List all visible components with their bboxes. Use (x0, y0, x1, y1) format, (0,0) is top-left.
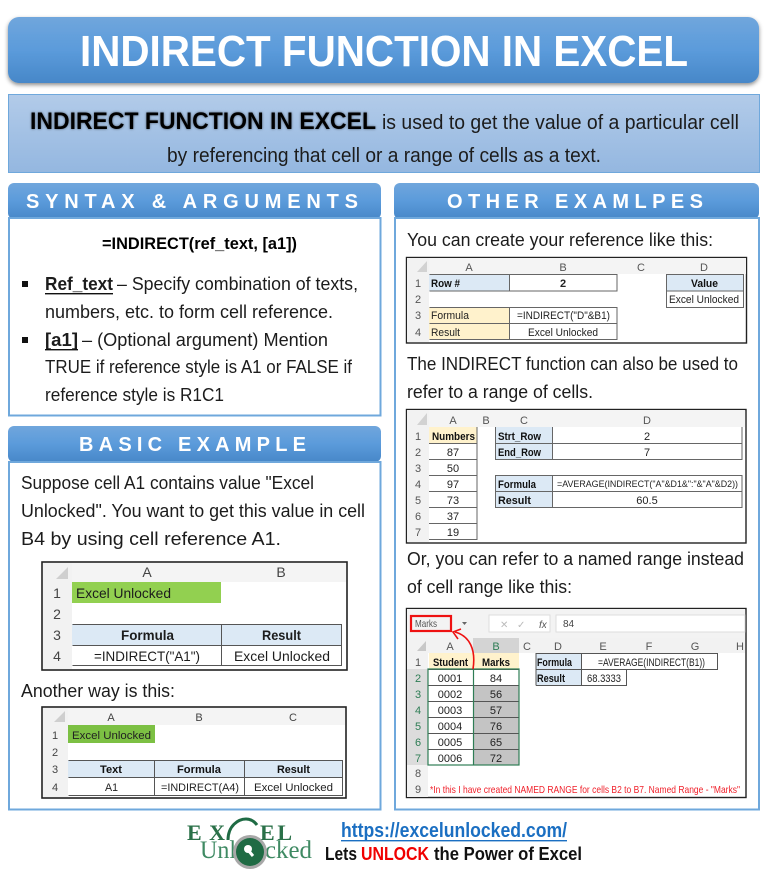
title banner (8, 17, 759, 83)
spreadsheet: named range: 5 (415, 721, 421, 733)
spreadsheet: concatenated reference: D (700, 262, 708, 274)
spreadsheet: average of range: 50 (447, 463, 459, 475)
bullet: ref_text: – Specify combination of texts, (117, 274, 358, 294)
icon: name box highlight (411, 616, 451, 631)
spreadsheet: named range: 76 (490, 721, 502, 733)
spreadsheet: concatenated reference: B (559, 262, 567, 274)
spreadsheet: average of range: Strt_Row (498, 431, 541, 443)
spreadsheet: concatenated reference: A (465, 262, 473, 274)
spreadsheet: concatenated reference: Result (431, 327, 460, 339)
spreadsheet: named range: 1 (415, 657, 421, 669)
spreadsheet: average of range: =AVERAGE(INDIRECT("A"&D1&":"&"A"&D2)) (557, 479, 738, 490)
spreadsheet: concatenated reference: 4 (415, 327, 421, 339)
spreadsheet: named range: 3 (415, 689, 421, 701)
example description: Unlocked". You want to get this value in cell (21, 501, 365, 521)
spreadsheet: named range: 8 (415, 768, 421, 780)
spreadsheet: named range: Formula (537, 657, 573, 669)
spreadsheet: named range: Student (433, 657, 468, 669)
spreadsheet: named range: 7 (415, 753, 421, 765)
spreadsheet: named range (406, 608, 746, 798)
spreadsheet: cell reference: B (195, 712, 203, 724)
spreadsheet: average of range: 5 (415, 495, 421, 507)
text: create your reference: You can create your reference like this: (407, 230, 713, 250)
spreadsheet: concatenated reference: 3 (415, 310, 421, 322)
bullet: ref_text: Ref_text (45, 274, 113, 294)
footer website link: https://excelunlocked.com/ (341, 820, 567, 842)
spreadsheet: cell reference (42, 707, 346, 798)
spreadsheet: direct reference: Result (262, 627, 301, 643)
spreadsheet: named range: fx (539, 620, 548, 631)
spreadsheet: named range: 0003 (438, 705, 462, 717)
spreadsheet: named range: A (446, 641, 454, 653)
spreadsheet: cell reference: 2 (52, 747, 58, 759)
heading: syntax and arguments (8, 183, 381, 219)
text: named range: of cell range like this: (407, 577, 572, 597)
spreadsheet: average of range: A (449, 415, 457, 427)
spreadsheet: concatenated reference: C (637, 262, 645, 274)
spreadsheet: average of range: D (643, 415, 651, 427)
spreadsheet: cell reference: Result (277, 764, 310, 776)
intro description panel: INDIRECT FUNCTION IN EXCEL (30, 108, 376, 135)
panel: other examples (394, 183, 759, 810)
footer tagline: UNLOCK (361, 844, 429, 864)
spreadsheet: direct reference (42, 562, 347, 670)
heading: other examples: OTHER EXAMLPES (447, 191, 703, 213)
spreadsheet: named range: Result (537, 673, 565, 685)
spreadsheet: concatenated reference: 1 (415, 278, 421, 290)
spreadsheet: named range: 0006 (438, 753, 462, 765)
spreadsheet: named range: 0001 (438, 673, 462, 685)
panel: syntax and arguments (8, 183, 381, 416)
spreadsheet: named range: C (523, 641, 531, 653)
bullet: ref_text: numbers, etc. to form cell reference. (45, 302, 333, 322)
spreadsheet: named range: 2 (415, 673, 421, 685)
text: range of cells (407, 354, 738, 402)
spreadsheet: named range: 0005 (438, 737, 462, 749)
spreadsheet: concatenated reference: Value (691, 278, 718, 290)
text: named range (407, 549, 744, 597)
spreadsheet: average of range: Result (498, 495, 531, 507)
text: range of cells: The INDIRECT function can also be used to (407, 354, 738, 374)
spreadsheet: average of range: 73 (447, 495, 459, 507)
spreadsheet: named range: 68.3333 (587, 673, 621, 685)
text: another way: Another way is this: (21, 681, 175, 701)
spreadsheet: named range: F (646, 641, 653, 653)
spreadsheet: average of range: 97 (447, 479, 459, 491)
example description: Suppose cell A1 contains value "Excel (21, 473, 314, 493)
spreadsheet: average of range: 1 (415, 431, 421, 443)
spreadsheet: concatenated reference: 2 (415, 294, 421, 306)
spreadsheet: average of range: 7 (415, 527, 421, 539)
spreadsheet: cell reference: Formula (177, 764, 222, 776)
spreadsheet: named range: 0002 (438, 689, 462, 701)
spreadsheet: cell reference: A (107, 712, 115, 724)
spreadsheet: direct reference: =INDIRECT("A1") (94, 648, 200, 664)
spreadsheet: named range: D (554, 641, 562, 653)
spreadsheet: named range: E (599, 641, 607, 653)
spreadsheet: named range: 9 (415, 784, 421, 796)
footer logo: EL (260, 820, 292, 845)
bullet: a1 (22, 330, 353, 405)
spreadsheet: named range: 84 (563, 619, 575, 630)
footer logo: Unl (200, 837, 236, 864)
footer tagline: Lets (325, 844, 357, 864)
spreadsheet: cell reference: =INDIRECT(A4) (161, 782, 239, 794)
spreadsheet: named range: Marks (415, 618, 437, 630)
syntax formula: =INDIRECT(ref_text, [a1]) (102, 234, 297, 253)
bullet: a1: reference style is R1C1 (45, 385, 224, 405)
spreadsheet: concatenated reference: Excel Unlocked (528, 327, 598, 339)
spreadsheet: cell reference: A1 (105, 782, 118, 794)
text: range of cells: refer to a range of cells. (407, 382, 593, 402)
spreadsheet: concatenated reference: 2 (560, 278, 566, 290)
spreadsheet: direct reference: 2 (53, 606, 61, 622)
spreadsheet: average of range: 37 (447, 511, 459, 523)
spreadsheet: cell reference: 4 (52, 782, 58, 794)
spreadsheet: average of range (406, 410, 746, 543)
example description: B4 by using cell reference A1. (21, 529, 281, 549)
spreadsheet: average of range: 7 (644, 447, 650, 459)
footer logo: cked (265, 837, 312, 864)
spreadsheet: concatenated reference (406, 258, 746, 343)
spreadsheet: average of range: B (482, 415, 490, 427)
spreadsheet: named range: H (736, 641, 744, 653)
spreadsheet: direct reference: Excel Unlocked (234, 648, 330, 664)
spreadsheet: average of range: 2 (644, 431, 650, 443)
spreadsheet: named range: 56 (490, 689, 502, 701)
spreadsheet: named range: 65 (490, 737, 502, 749)
spreadsheet: cell reference: Excel Unlocked (254, 782, 333, 794)
spreadsheet: direct reference: 3 (53, 627, 61, 643)
heading: basic example: BASIC EXAMPLE (79, 434, 306, 456)
spreadsheet: direct reference: 1 (53, 585, 61, 601)
footer tagline: the Power of Excel (434, 844, 582, 864)
spreadsheet: concatenated reference: Excel Unlocked (669, 294, 739, 306)
spreadsheet: named range: G (691, 641, 699, 653)
spreadsheet: average of range: 3 (415, 463, 421, 475)
spreadsheet: average of range: 60.5 (636, 495, 658, 507)
spreadsheet: named range: =AVERAGE(INDIRECT(B1)) (598, 657, 705, 669)
spreadsheet: direct reference: Formula (121, 627, 174, 643)
spreadsheet: named range: 4 (415, 705, 421, 717)
bullet: a1: [a1] (45, 330, 78, 350)
spreadsheet: average of range: C (520, 415, 528, 427)
spreadsheet: cell reference: Excel Unlocked (72, 730, 151, 742)
spreadsheet: named range: 72 (490, 753, 502, 765)
spreadsheet: direct reference: Excel Unlocked (76, 585, 171, 601)
arrow: named range to name box (453, 629, 474, 669)
title banner: INDIRECT FUNCTION IN EXCEL (80, 27, 688, 76)
bullet: ref_text (22, 274, 358, 322)
bullet: a1: TRUE if reference style is A1 or FALSE if (45, 357, 353, 377)
spreadsheet: concatenated reference: Row # (431, 278, 460, 290)
spreadsheet: named range: ✕ (500, 620, 508, 631)
spreadsheet: cell reference: 3 (52, 764, 58, 776)
spreadsheet: average of range: Formula (498, 479, 537, 491)
heading: syntax and arguments: SYNTAX & ARGUMENTS (26, 191, 358, 213)
intro description panel (8, 94, 760, 172)
spreadsheet: cell reference: Text (100, 764, 122, 776)
heading: basic example (8, 426, 381, 462)
spreadsheet: named range: 84 (490, 673, 502, 685)
spreadsheet: average of range: 2 (415, 447, 421, 459)
spreadsheet: named range: 57 (490, 705, 502, 717)
spreadsheet: average of range: 87 (447, 447, 459, 459)
text: named range: Or, you can refer to a named range instead (407, 549, 744, 569)
spreadsheet: cell reference: 1 (52, 730, 58, 742)
intro description panel: by referencing that cell or a range of cells as a text. (167, 145, 601, 167)
intro description panel: is used to get the value of a particular cell (382, 112, 739, 134)
panel: basic example (8, 426, 381, 810)
footer tagline (325, 844, 582, 864)
spreadsheet: average of range: 6 (415, 511, 421, 523)
heading: other examples (394, 183, 759, 219)
spreadsheet: concatenated reference: =INDIRECT("D"&B1) (517, 310, 610, 322)
spreadsheet: named range: 0004 (438, 721, 462, 733)
spreadsheet: named range: 6 (415, 737, 421, 749)
bullet: a1: – (Optional argument) Mention (82, 330, 328, 350)
spreadsheet: cell reference: C (289, 712, 297, 724)
footer logo: EX (187, 820, 225, 845)
spreadsheet: average of range: 19 (447, 527, 459, 539)
spreadsheet: direct reference: A (142, 564, 152, 580)
spreadsheet: average of range: End_Row (498, 447, 541, 459)
footer logo (187, 819, 312, 869)
spreadsheet: average of range: Numbers (432, 431, 475, 443)
spreadsheet: named range: ✓ (517, 620, 525, 631)
spreadsheet: average of range: 4 (415, 479, 421, 491)
example description (21, 473, 365, 549)
spreadsheet: named range: B (492, 641, 500, 653)
spreadsheet: direct reference: 4 (53, 648, 61, 664)
spreadsheet: direct reference: B (276, 564, 286, 580)
spreadsheet: named range: Marks (482, 657, 510, 669)
spreadsheet: concatenated reference: Formula (431, 310, 470, 322)
